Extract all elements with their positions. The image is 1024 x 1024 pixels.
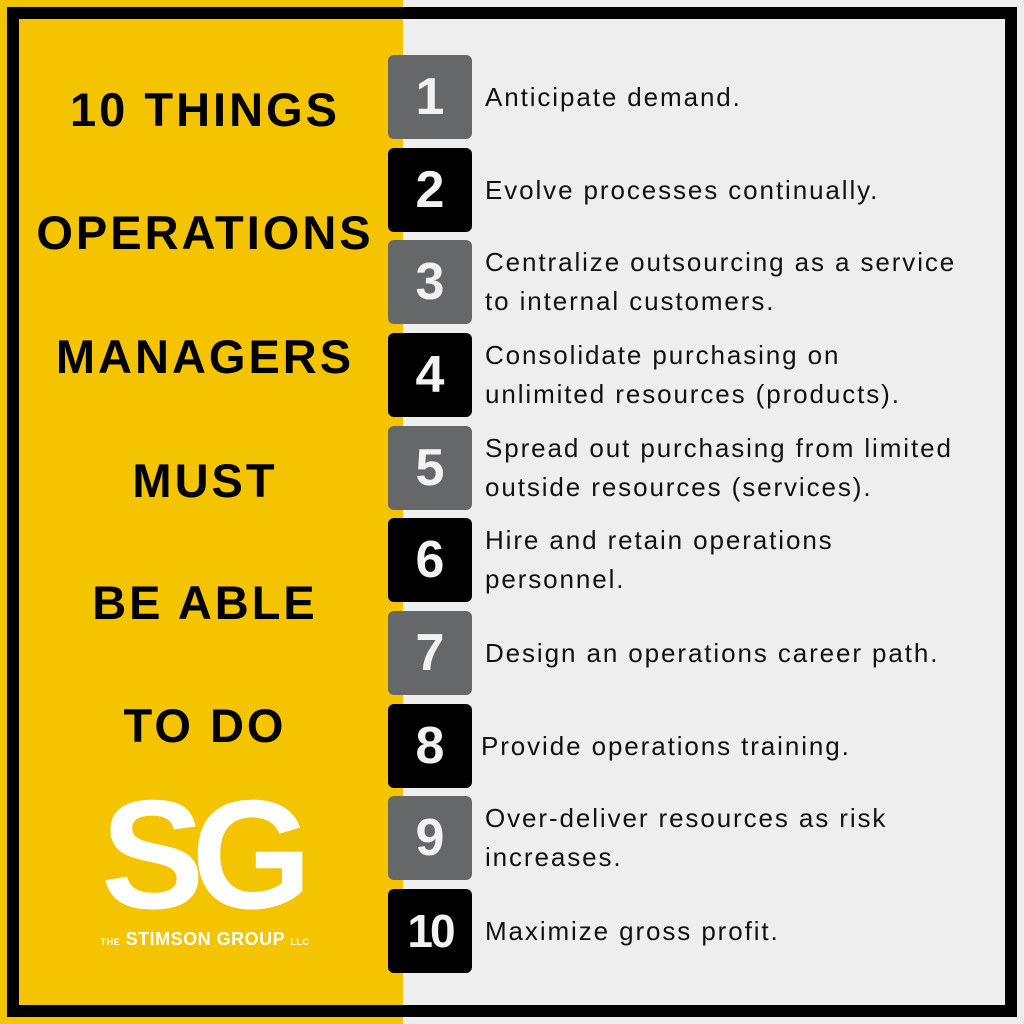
list: Spread out purchasing from limited [485, 433, 953, 463]
list: Design an operations career path. [485, 638, 939, 668]
title: TO DO [124, 699, 286, 752]
list: 10 [407, 905, 453, 957]
list: Hire and retain operations [485, 525, 834, 555]
logo: THE STIMSON GROUP LLC [101, 929, 309, 949]
title: MANAGERS [56, 330, 354, 383]
list: Over-deliver resources as risk [485, 803, 887, 833]
list: 4 [416, 346, 444, 404]
list: 3 [416, 253, 444, 311]
title: OPERATIONS [36, 206, 374, 259]
list: 9 [416, 809, 444, 867]
list: 5 [416, 439, 444, 497]
list: unlimited resources (products). [485, 379, 901, 409]
list [388, 55, 956, 973]
list: 7 [416, 624, 444, 682]
list: outside resources (services). [485, 472, 872, 502]
title [36, 83, 374, 752]
list: 8 [416, 717, 444, 775]
list: Centralize outsourcing as a service [485, 247, 956, 277]
title: MUST [132, 454, 278, 507]
list: to internal customers. [485, 286, 775, 316]
list: increases. [485, 842, 622, 872]
list: Maximize gross profit. [485, 916, 780, 946]
list: 1 [416, 68, 444, 126]
list: Anticipate demand. [485, 82, 742, 112]
list: 6 [416, 531, 444, 589]
list: Evolve processes continually. [485, 174, 879, 204]
list: personnel. [485, 564, 625, 594]
list: 2 [416, 161, 444, 219]
title: 10 THINGS [70, 83, 340, 136]
logo: SG [101, 768, 299, 941]
list: Consolidate purchasing on [485, 340, 840, 370]
title: BE ABLE [92, 576, 318, 629]
list: Provide operations training. [481, 730, 851, 760]
